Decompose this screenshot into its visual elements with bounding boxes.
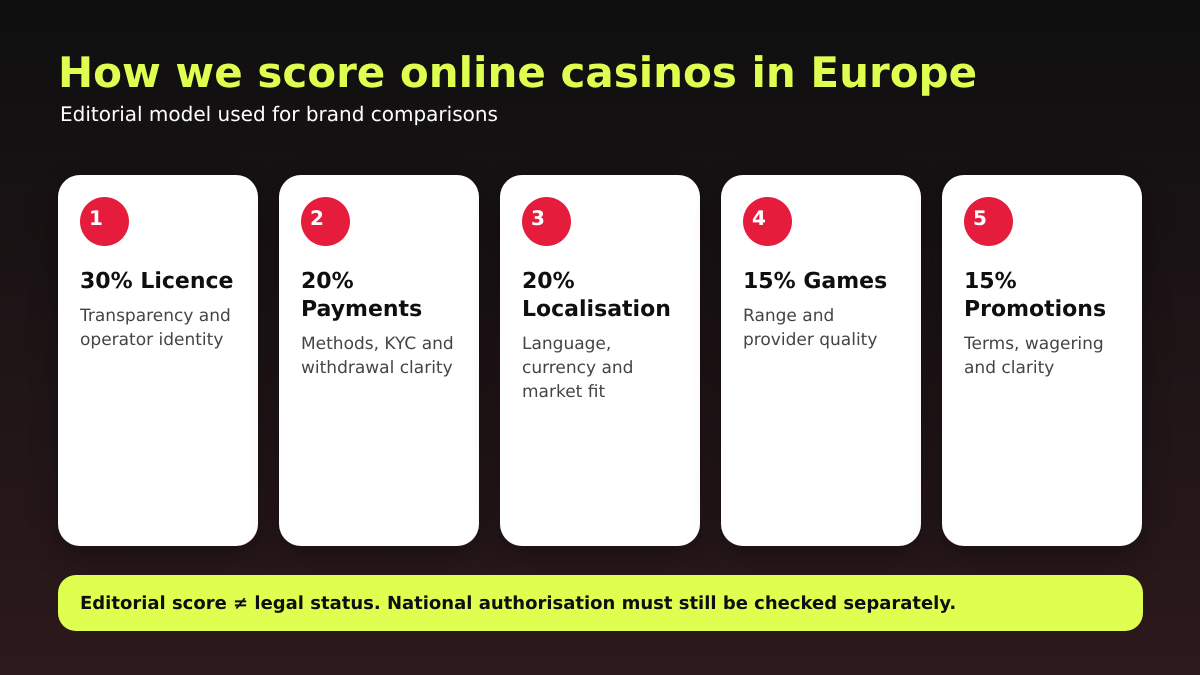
heading: localisation: 20% Localisation [522, 269, 671, 322]
badge 1 [80, 197, 129, 246]
badge 3: 3 [531, 206, 545, 230]
text: games: Range and [743, 306, 834, 326]
text: games [743, 306, 877, 350]
text: promotions: Terms, wagering [964, 334, 1104, 354]
badge 2: 2 [310, 206, 324, 230]
badge 5: 5 [973, 206, 987, 230]
panel: licence [58, 175, 258, 546]
callout: disclaimer: Editorial score ≠ legal status. National authorisation must still be checked separately. [80, 593, 956, 614]
badge 4: 4 [752, 206, 766, 230]
text: licence: Transparency and operator identity [80, 306, 231, 350]
callout: disclaimer [58, 575, 1143, 631]
text: payments: Methods, KYC and withdrawal clarity [301, 334, 454, 378]
text: localisation: market fit [522, 382, 605, 402]
heading: promotions: 15% Promotions [964, 269, 1106, 322]
badge 2 [301, 197, 350, 246]
heading: payments: 20% Payments [301, 269, 422, 322]
text: localisation [522, 334, 633, 402]
text: localisation: currency and [522, 358, 633, 378]
heading: games: 15% Games [743, 269, 887, 294]
heading: licence: 30% Licence [80, 269, 233, 294]
badge 4 [743, 197, 792, 246]
text: games: provider quality [743, 330, 877, 350]
badge 1: 1 [89, 206, 103, 230]
panel: games [721, 175, 921, 546]
panel: payments [279, 175, 479, 546]
title: How we score online casinos in Europe [58, 48, 977, 97]
badge 3 [522, 197, 571, 246]
text: promotions: and clarity [964, 358, 1054, 378]
subtitle: Editorial model used for brand comparisons [60, 102, 498, 126]
text: promotions [964, 334, 1104, 378]
panel: localisation [500, 175, 700, 546]
badge 5 [964, 197, 1013, 246]
text: localisation: Language, [522, 334, 611, 354]
panel: promotions [942, 175, 1142, 546]
